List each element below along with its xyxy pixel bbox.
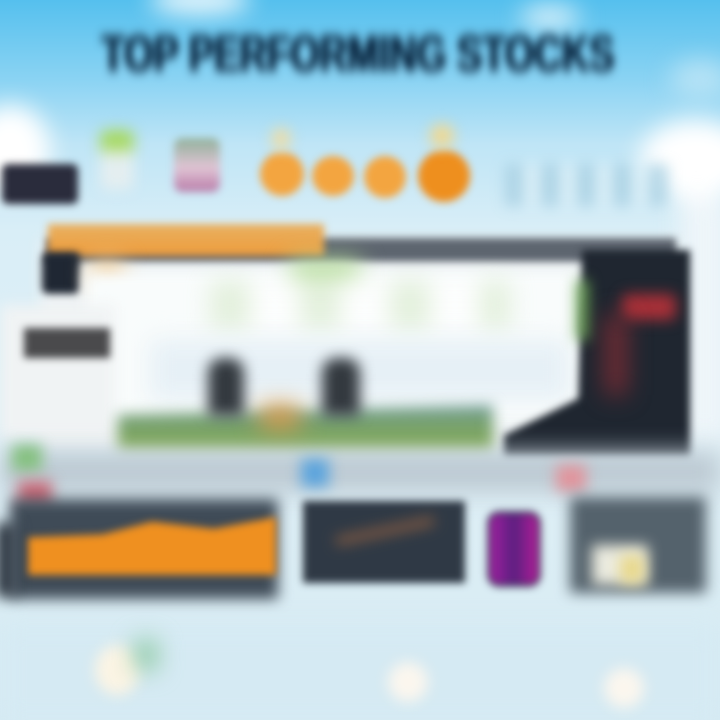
icon: green accent (135, 640, 157, 670)
white chart area (85, 272, 580, 422)
orange figure (260, 405, 300, 429)
red tag (18, 481, 52, 507)
icon: bottom right badge (604, 668, 644, 708)
dark corner icon (42, 252, 80, 294)
pale green marks (210, 280, 510, 330)
grey card (570, 497, 706, 593)
left side label (0, 305, 115, 440)
panel: orange chart (0, 435, 289, 610)
header bar (46, 238, 676, 262)
green tag (12, 445, 42, 471)
dark tower right (322, 358, 360, 416)
icon: pale bars (505, 164, 670, 206)
icon row (0, 116, 676, 210)
green ticks (290, 260, 360, 282)
dark card (303, 501, 465, 583)
panel: main chart (0, 218, 696, 460)
dark left edge (0, 523, 16, 597)
yellow mark (620, 555, 644, 583)
bright inset (592, 545, 648, 585)
icon: bottom center badge (388, 662, 428, 702)
icon: dark badge (2, 164, 78, 204)
magenta tile (487, 511, 541, 587)
dark tower left (208, 358, 244, 416)
orange bars (22, 512, 282, 582)
dark card (10, 499, 278, 599)
header progress (48, 224, 324, 256)
blue tag (301, 459, 329, 487)
orange trend line (335, 517, 435, 545)
orange marker (92, 260, 122, 288)
landscape (107, 396, 504, 457)
title: TOP PERFORMING STOCKS (101, 27, 615, 83)
dark panel right (498, 244, 696, 460)
pale blue cloud in chart (150, 340, 570, 400)
icon: bottom left badge (95, 645, 140, 695)
red tag (556, 465, 586, 491)
panel: dark chart (292, 450, 548, 594)
icon: chart tile (174, 138, 220, 192)
dark label (24, 328, 110, 358)
icon: orange medals (254, 116, 476, 208)
red marker (622, 294, 676, 320)
band under chart (0, 452, 720, 492)
panel: grey chart (549, 458, 717, 604)
bottom band (0, 625, 720, 720)
icon: green check (100, 130, 134, 190)
panel background (40, 240, 680, 450)
green spark (576, 280, 588, 340)
red stem (606, 315, 626, 395)
